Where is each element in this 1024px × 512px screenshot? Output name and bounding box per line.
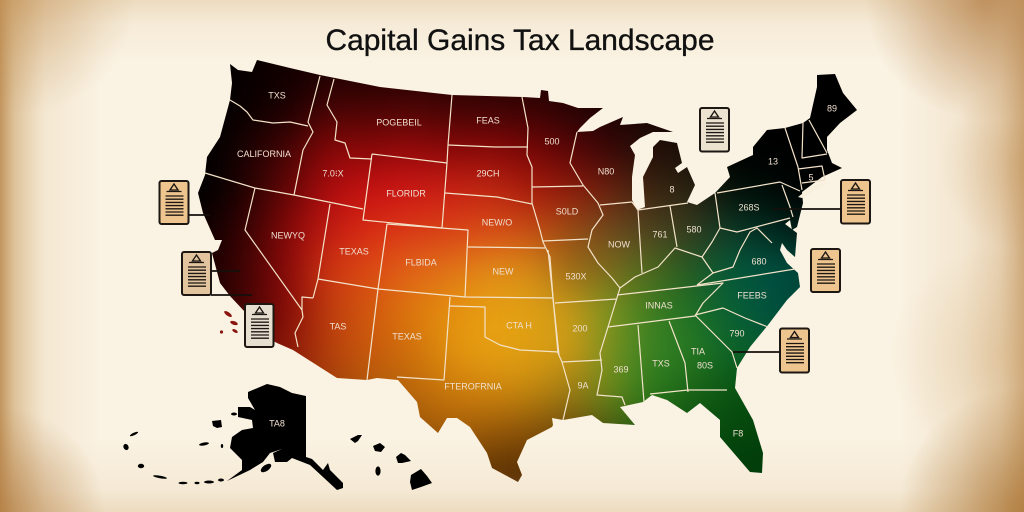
label: F8: F8	[733, 428, 743, 438]
label: 89: 89	[827, 104, 837, 114]
icon: tax document, Great Lakes	[700, 108, 729, 152]
label: FTEROFRNIA: FTEROFRNIA	[444, 382, 502, 392]
label: 530X: 530X	[565, 272, 587, 282]
icon: tax document, southern California	[245, 304, 274, 347]
label: 200: 200	[572, 324, 588, 334]
label: TA8 Alaska: TA8	[269, 418, 285, 428]
leader lines	[189, 209, 841, 352]
label: 9A: 9A	[577, 380, 589, 390]
Long Island sound cut	[798, 182, 828, 198]
label: FEEBS: FEEBS	[737, 290, 767, 300]
label: TIA: TIA	[691, 346, 705, 356]
icon: tax document, Georgia coast	[780, 328, 809, 372]
label: 5: 5	[808, 172, 814, 182]
label: 8: 8	[669, 184, 675, 194]
Alaska	[122, 384, 343, 490]
label: NOW: NOW	[608, 240, 630, 250]
label: NEW/O: NEW/O	[482, 218, 512, 228]
label: FLBIDA: FLBIDA	[405, 258, 437, 268]
label: 29CH: 29CH	[476, 168, 500, 178]
label: S0LD: S0LD	[556, 206, 579, 216]
label: 790: 790	[729, 328, 745, 338]
icon: tax document, mid-Atlantic	[841, 180, 870, 224]
label: 761: 761	[652, 230, 668, 240]
state value labels	[237, 90, 837, 438]
Hawaii	[350, 435, 432, 490]
map: contiguous United States heat map	[198, 60, 857, 482]
label: N80: N80	[598, 166, 614, 176]
label: POGEBEIL: POGEBEIL	[376, 118, 422, 128]
label: 369: 369	[613, 364, 629, 374]
label: 80S: 80S	[697, 360, 713, 370]
label: NEW: NEW	[492, 266, 514, 276]
label: TXS: TXS	[268, 90, 286, 100]
label: 500: 500	[544, 136, 560, 146]
label: TEXAS: TEXAS	[339, 246, 369, 256]
label: CALIFORNIA: CALIFORNIA	[237, 149, 291, 159]
label: TAS: TAS	[330, 322, 346, 332]
state borders	[205, 76, 827, 420]
Channel Islands	[220, 310, 238, 334]
icon: tax document, Carolina coast	[811, 249, 840, 292]
label: 580: 580	[686, 224, 702, 234]
label: CTA H: CTA H	[506, 320, 532, 330]
label: FLORIDR: FLORIDR	[386, 188, 426, 198]
label: 268S: 268S	[738, 202, 760, 212]
icon: tax document, west coast upper	[160, 181, 188, 224]
label: FEAS: FEAS	[476, 116, 500, 126]
label: TXS south: TXS	[652, 358, 670, 368]
label: INNAS: INNAS	[645, 300, 673, 310]
title: Capital Gains Tax Landscape	[326, 24, 714, 57]
label: 680: 680	[751, 256, 767, 266]
label: TEXAS south: TEXAS	[392, 332, 422, 342]
label: NEWYQ: NEWYQ	[271, 230, 305, 240]
label: 13: 13	[768, 156, 778, 166]
label: 7.0X: 7.0⁝X	[322, 168, 344, 178]
icon: tax document, west coast middle	[182, 252, 211, 295]
